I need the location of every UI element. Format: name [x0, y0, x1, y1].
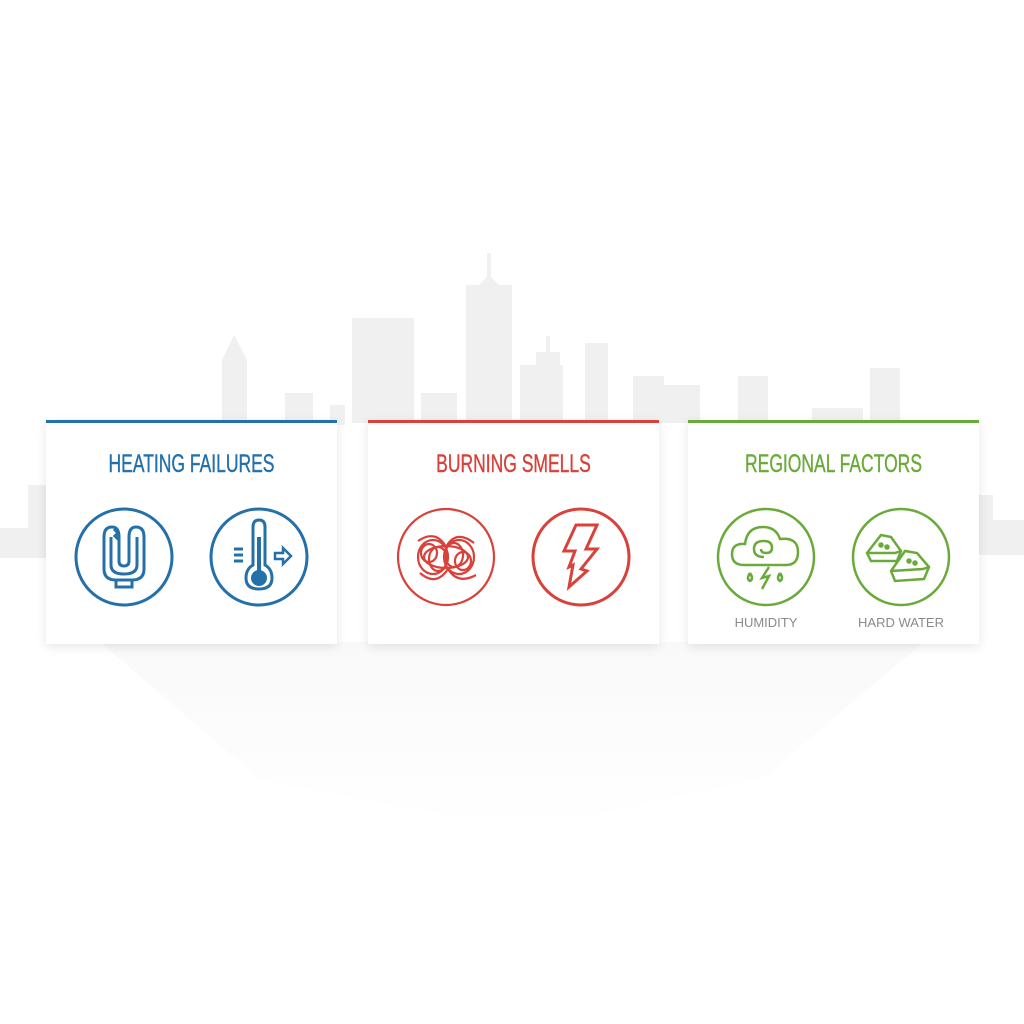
panel: regional factors: [688, 420, 979, 644]
icon: lightning bolt: [532, 508, 630, 606]
heading: regional factors: REGIONAL FACTORS: [745, 450, 922, 478]
icon: tangled wire: [396, 508, 496, 606]
icon: humidity cloud: [716, 508, 816, 606]
panel: burning smells: [368, 420, 659, 644]
panel: heating failures: [46, 420, 337, 644]
icon: thermometer: [210, 508, 308, 606]
heading: burning smells: BURNING SMELLS: [436, 450, 591, 478]
label: hard water: HARD WATER: [858, 615, 944, 630]
icon: hard water scale: [852, 508, 950, 606]
label: humidity: HUMIDITY: [735, 615, 797, 630]
heading: heating failures: HEATING FAILURES: [109, 450, 274, 478]
icon: broken heating element: [74, 508, 174, 606]
